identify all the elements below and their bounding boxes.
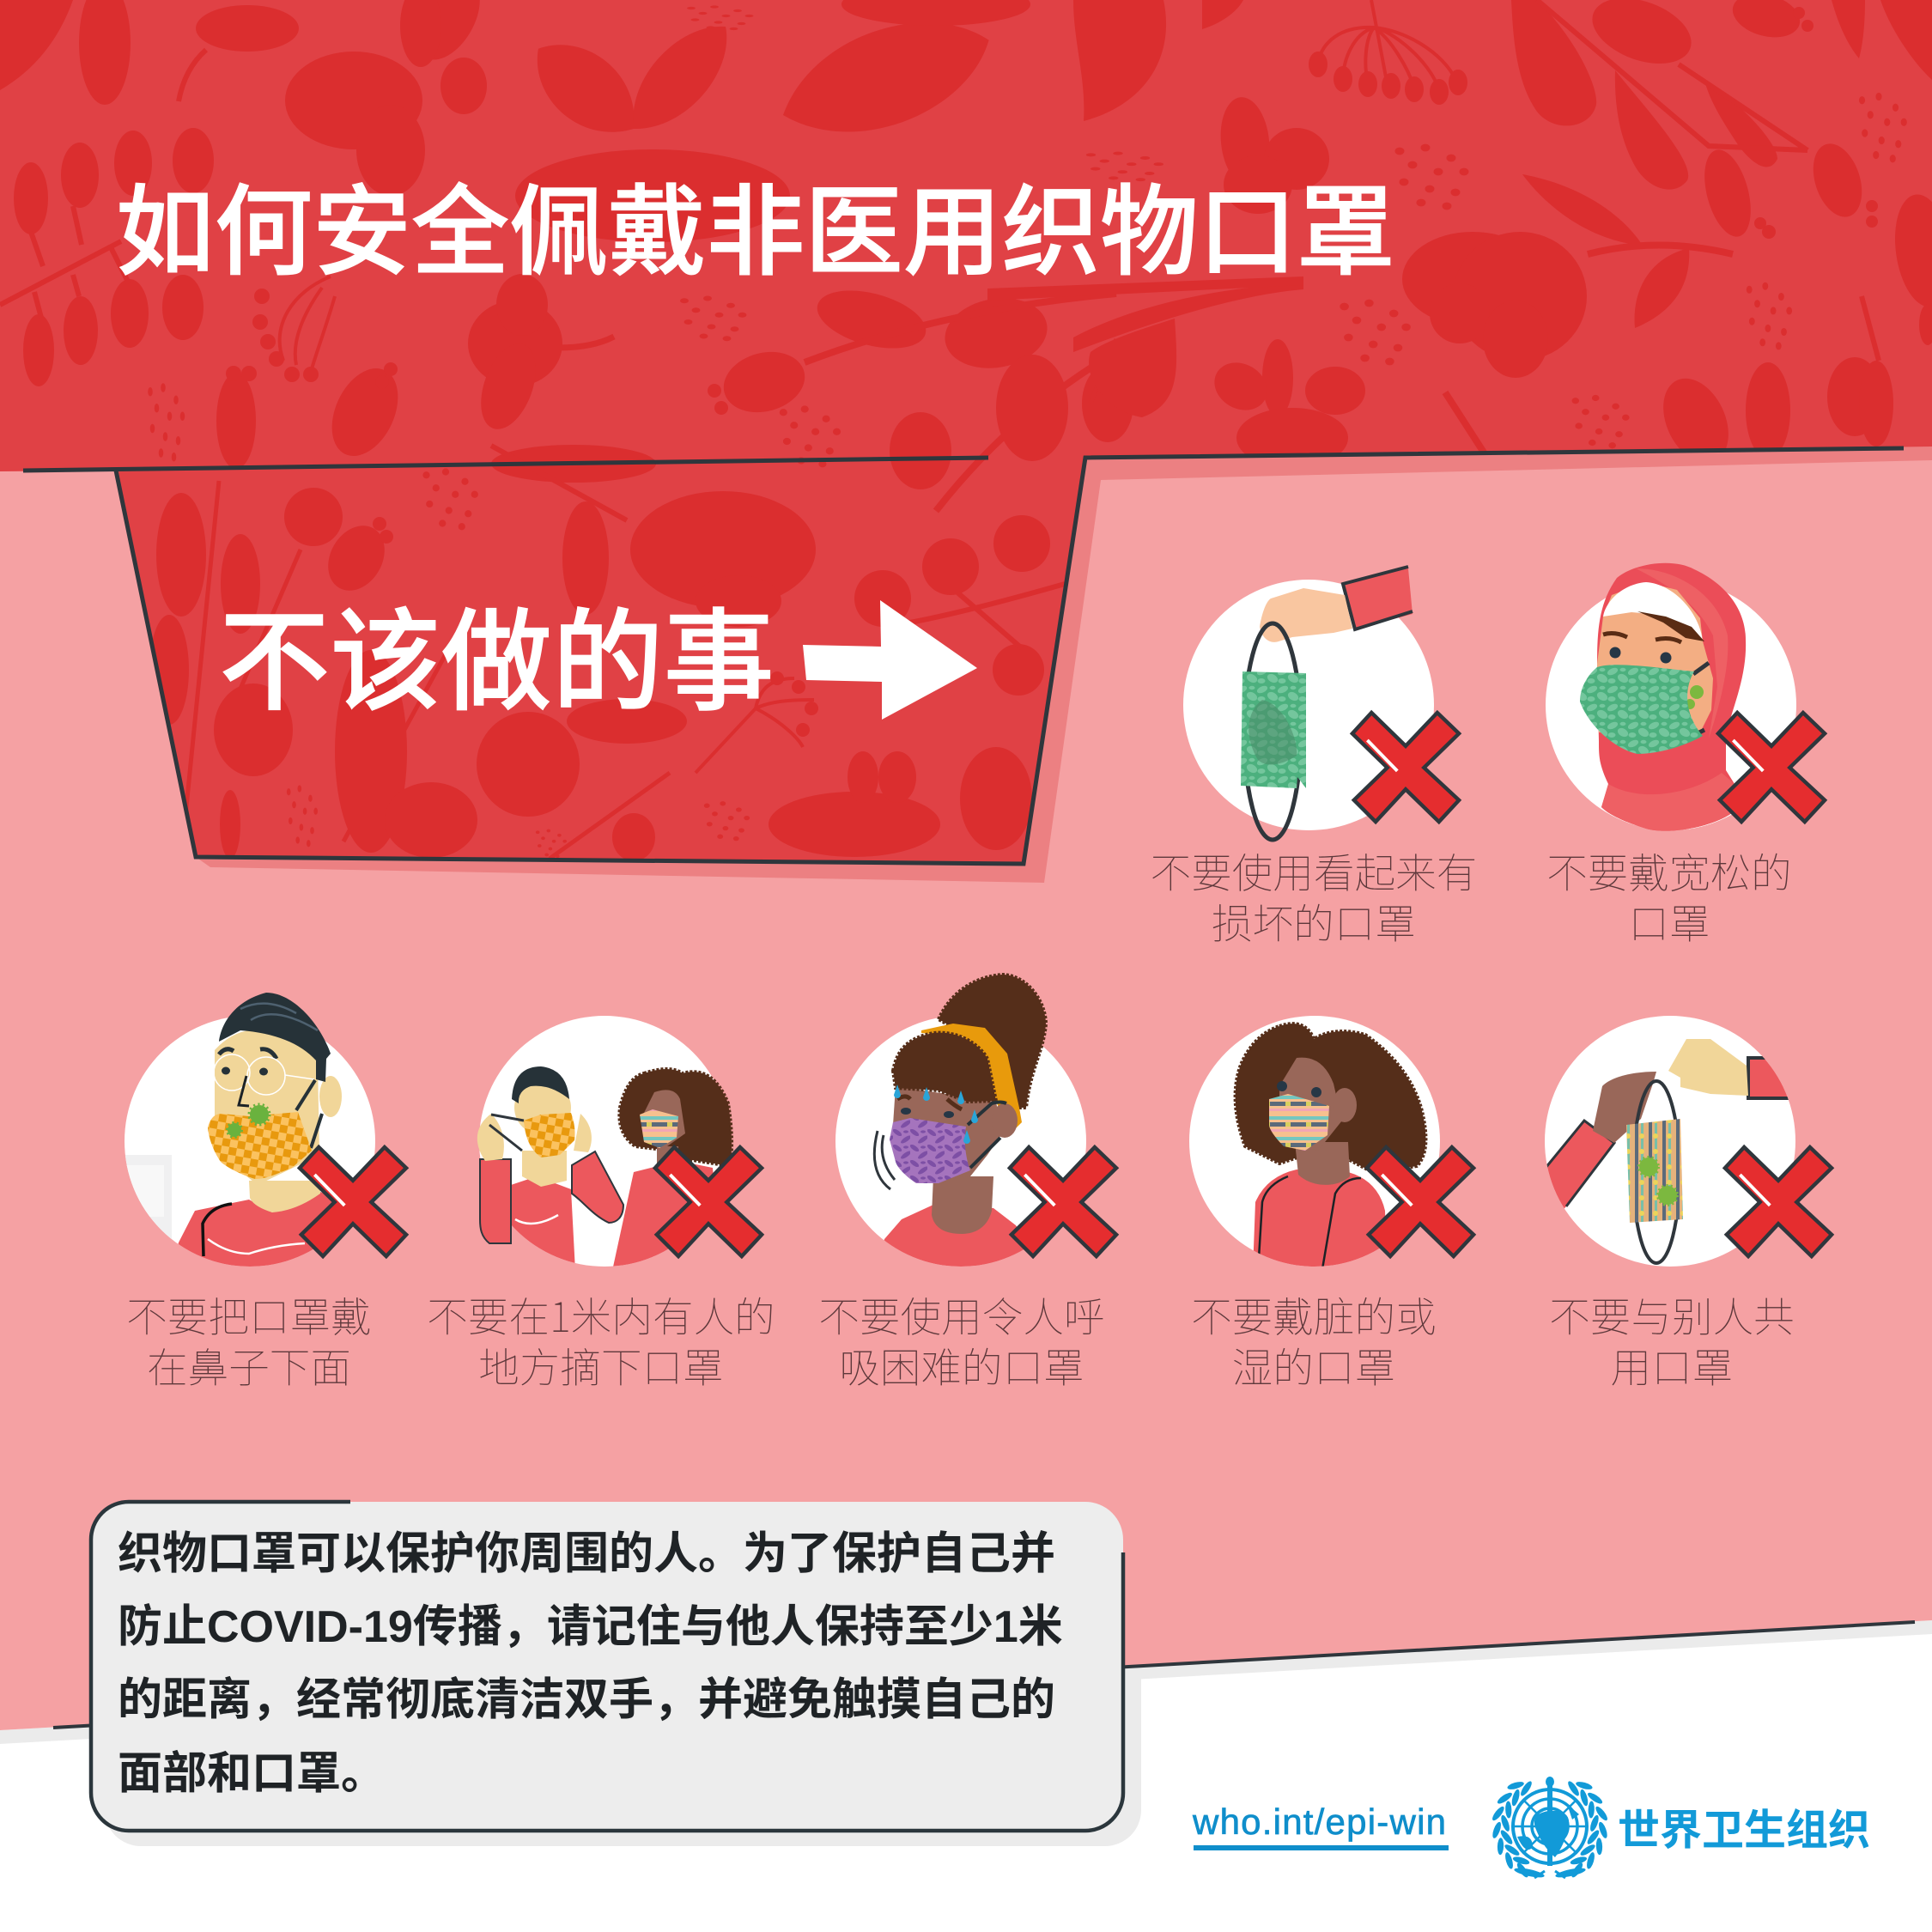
caption: breathing difficulty bbox=[818, 1296, 1105, 1392]
callout: hand hygiene note bbox=[91, 1502, 1123, 1831]
icon: woman struggling to breathe bbox=[874, 975, 1048, 1271]
tile: dirty or wet mask bbox=[1189, 1016, 1473, 1271]
caption: dirty or wet mask: 不要戴脏的或 bbox=[1191, 1296, 1437, 1341]
icon: woman nearby bbox=[612, 1069, 732, 1271]
callout text: 面部和口罩。 bbox=[118, 1749, 386, 1799]
caption: dirty or wet mask bbox=[1191, 1296, 1437, 1392]
caption: mask under nose bbox=[126, 1296, 372, 1392]
icon: cross bbox=[1718, 713, 1825, 822]
icon: cross bbox=[1725, 1147, 1832, 1256]
icon: woman in patterned mask bbox=[1236, 1024, 1425, 1271]
bottom edge band bbox=[0, 1620, 1932, 1744]
icon: two hands passing mask bbox=[1537, 1039, 1803, 1263]
caption: breathing difficulty: 吸困难的口罩 bbox=[839, 1346, 1084, 1392]
callout text: 的距离，经常彻底清洁双手，并避免触摸自己的 bbox=[118, 1675, 1055, 1725]
callout text: 防止COVID-19传播，请记住与他人保持至少1米 bbox=[118, 1602, 1063, 1652]
tile: sharing a mask bbox=[1537, 1016, 1832, 1267]
caption: mask under nose: 在鼻子下面 bbox=[147, 1346, 351, 1392]
callout text: 织物口罩可以保护你周围的人。为了保护自己并 bbox=[118, 1529, 1055, 1579]
pink background panel bbox=[0, 438, 1932, 1730]
drop shadow of red header and banner bbox=[196, 445, 1932, 883]
header outline segments bbox=[23, 448, 1904, 864]
arrow bbox=[803, 600, 977, 720]
caption: damaged mask bbox=[1151, 852, 1477, 948]
footer link: who.int/epi-win bbox=[1192, 1801, 1446, 1842]
caption: sharing a mask bbox=[1549, 1296, 1795, 1392]
title: 如何安全佩戴非医用织物口罩 bbox=[116, 178, 1395, 288]
caption: damaged mask: 损坏的口罩 bbox=[1212, 902, 1416, 948]
caption: removing mask near people: 不要在1米内有人的 bbox=[427, 1285, 775, 1344]
icon: man adjusting mask bbox=[477, 1066, 623, 1271]
icon: hand and sleeve bbox=[1260, 567, 1413, 642]
callout shadow bbox=[105, 1516, 1141, 1846]
caption: sharing a mask: 用口罩 bbox=[1611, 1346, 1733, 1392]
tile: loose mask bbox=[1546, 563, 1825, 831]
icon: damaged green mask bbox=[1241, 623, 1306, 840]
pink panel bottom edge line bbox=[53, 1622, 1915, 1728]
caption: loose mask bbox=[1546, 852, 1792, 948]
icon: WHO emblem bbox=[1491, 1777, 1609, 1880]
caption: removing mask near people bbox=[427, 1285, 775, 1392]
banner heading: 不该做的事 bbox=[219, 601, 775, 725]
caption: loose mask: 不要戴宽松的 bbox=[1546, 852, 1792, 897]
icon: woman in hijab bbox=[1580, 563, 1746, 831]
icon: cross bbox=[300, 1147, 406, 1256]
caption: loose mask: 口罩 bbox=[1628, 902, 1710, 948]
icon: man with mask under nose bbox=[125, 993, 361, 1271]
callout text bbox=[118, 1529, 1063, 1799]
tile: breathing difficulty bbox=[835, 975, 1116, 1271]
icon: cross bbox=[655, 1147, 762, 1256]
tile: mask under nose bbox=[125, 993, 406, 1271]
icon: cross bbox=[1352, 713, 1459, 822]
tile: damaged mask bbox=[1183, 567, 1459, 840]
tile: removing mask near people bbox=[477, 1016, 762, 1271]
caption: removing mask near people: 地方摘下口罩 bbox=[478, 1346, 724, 1392]
caption: dirty or wet mask: 湿的口罩 bbox=[1232, 1346, 1395, 1392]
caption: damaged mask: 不要使用看起来有 bbox=[1151, 852, 1477, 897]
caption: sharing a mask: 不要与别人共 bbox=[1549, 1296, 1795, 1341]
icon: cross bbox=[1010, 1147, 1116, 1256]
WHO name: 世界卫生组织 bbox=[1618, 1807, 1870, 1854]
caption: breathing difficulty: 不要使用令人呼 bbox=[818, 1296, 1105, 1341]
icon: cross bbox=[1367, 1147, 1473, 1256]
caption: mask under nose: 不要把口罩戴 bbox=[126, 1296, 372, 1341]
red header and banner with floral pattern bbox=[0, 0, 1932, 864]
